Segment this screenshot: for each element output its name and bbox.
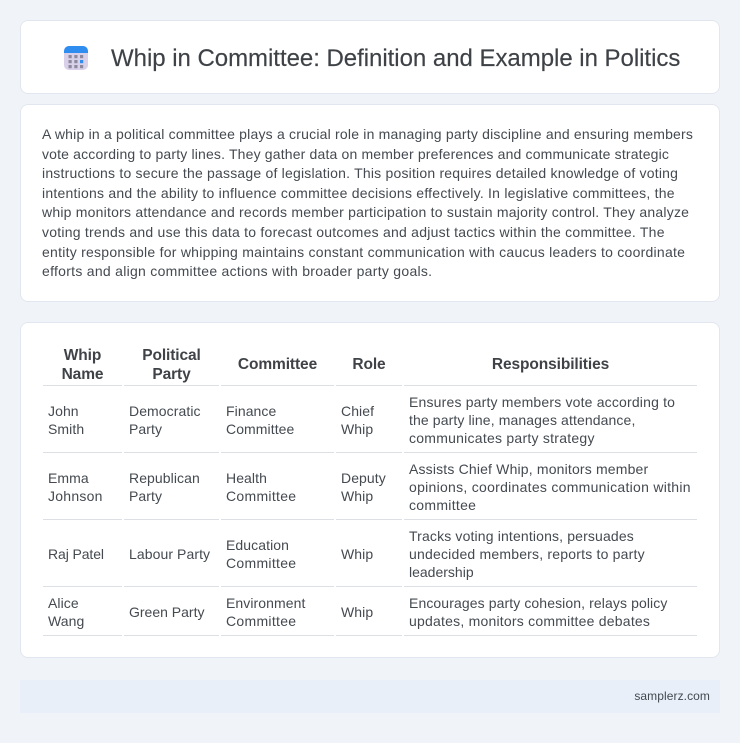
table row: Raj Patel: Education — [226, 537, 289, 553]
table row: Alice Wang: Whip — [341, 604, 373, 620]
table row: Raj Patel: Tracks voting intentions, persuades — [409, 528, 634, 544]
table row: Emma Johnson: Johnson — [48, 488, 103, 504]
table row: John Smith: communicates party strategy — [409, 430, 595, 446]
header: Responsibilities: Responsibilities — [492, 356, 609, 373]
table header row — [62, 347, 609, 383]
table row: Emma Johnson: committee — [409, 497, 476, 513]
text block: intro paragraph: instructions to secure the passage of legislation. This position requires detailed knowledge of voting — [42, 165, 678, 181]
table row: Raj Patel — [43, 519, 697, 580]
text block: intro paragraph: intentions and the ability to influence committee decisions effectively. In legislative committees, the — [42, 185, 675, 201]
table row: Raj Patel: Whip — [341, 546, 373, 562]
footer text: samplerz.com — [634, 689, 710, 703]
table row: Alice Wang: Environment — [226, 595, 305, 611]
table row: Alice Wang: Wang — [48, 613, 84, 629]
text block: intro paragraph — [42, 126, 693, 279]
table row: Emma Johnson — [43, 452, 697, 513]
table row: John Smith: Chief — [341, 403, 374, 419]
text block: intro paragraph: whip monitors attendance and records member participation to sustain majority control. They analyze — [42, 204, 689, 220]
header: Role: Role — [352, 356, 386, 373]
table row: John Smith: Democratic — [129, 403, 201, 419]
table row: John Smith: Ensures party members vote according to — [409, 394, 675, 410]
header: Whip Name: Whip — [64, 347, 101, 364]
header: Committee: Committee — [238, 356, 317, 373]
text block: intro paragraph: voting trends and use this data to forecast outcomes and adjust tactics within the committee. The — [42, 224, 665, 240]
table row: John Smith: Smith — [48, 421, 84, 437]
table row: Emma Johnson: Deputy — [341, 470, 386, 486]
text block: intro paragraph: entity responsible for whipping maintains constant communication with caucus leaders to coordinate — [42, 244, 685, 260]
table row: John Smith: Finance — [226, 403, 276, 419]
panel: intro text — [20, 104, 720, 302]
title: Whip in Committee: Definition and Example in Politics — [111, 45, 680, 72]
header: Whip Name: Name — [62, 366, 103, 383]
header: Whip Name — [62, 347, 103, 383]
table row: Raj Patel: leadership — [409, 564, 474, 580]
table row: Raj Patel: undecided members, reports to party — [409, 546, 645, 562]
table row: Emma Johnson: opinions, coordinates communication within — [409, 479, 691, 495]
table row: John Smith: Party — [129, 421, 162, 437]
table row: Raj Patel: Raj Patel — [48, 546, 104, 562]
panel: header — [20, 20, 720, 94]
table row: Emma Johnson: Emma — [48, 470, 89, 486]
text block: intro paragraph: efforts and align committee actions with broader party goals. — [42, 263, 432, 279]
table row: Alice Wang: Green Party — [129, 604, 204, 620]
table row: Alice Wang: Alice — [48, 595, 79, 611]
table row: Emma Johnson: Assists Chief Whip, monitors member — [409, 461, 648, 477]
table row: Emma Johnson: Committee — [226, 488, 296, 504]
header: Political Party — [142, 347, 201, 383]
table row: John Smith: Whip — [341, 421, 373, 437]
text block: intro paragraph: vote according to party lines. They gather data on member preferences and communicate strategic — [42, 146, 669, 162]
header: Political Party: Party — [152, 366, 191, 383]
table row: Emma Johnson: Party — [129, 488, 162, 504]
text block: intro paragraph: A whip in a political committee plays a crucial role in managing party discipline and ensuring members — [42, 126, 693, 142]
table row: John Smith: Committee — [226, 421, 294, 437]
table row: Emma Johnson: Whip — [341, 488, 373, 504]
table row: Emma Johnson: Health — [226, 470, 267, 486]
panel: table — [20, 322, 720, 658]
table row: John Smith: John — [48, 403, 79, 419]
header: Political Party: Political — [142, 347, 201, 364]
icon: calendar — [64, 46, 88, 70]
table row: John Smith: the party line, manages attendance, — [409, 412, 635, 428]
table row: Alice Wang: Committee — [226, 613, 296, 629]
table row: John Smith — [43, 385, 697, 446]
footer bar — [20, 680, 720, 713]
table row: Emma Johnson: Republican — [129, 470, 200, 486]
table row: Alice Wang: Encourages party cohesion, relays policy — [409, 595, 667, 611]
table row: Raj Patel: Committee — [226, 555, 296, 571]
table row: Alice Wang: updates, monitors committee debates — [409, 613, 650, 629]
table row: Raj Patel: Labour Party — [129, 546, 210, 562]
